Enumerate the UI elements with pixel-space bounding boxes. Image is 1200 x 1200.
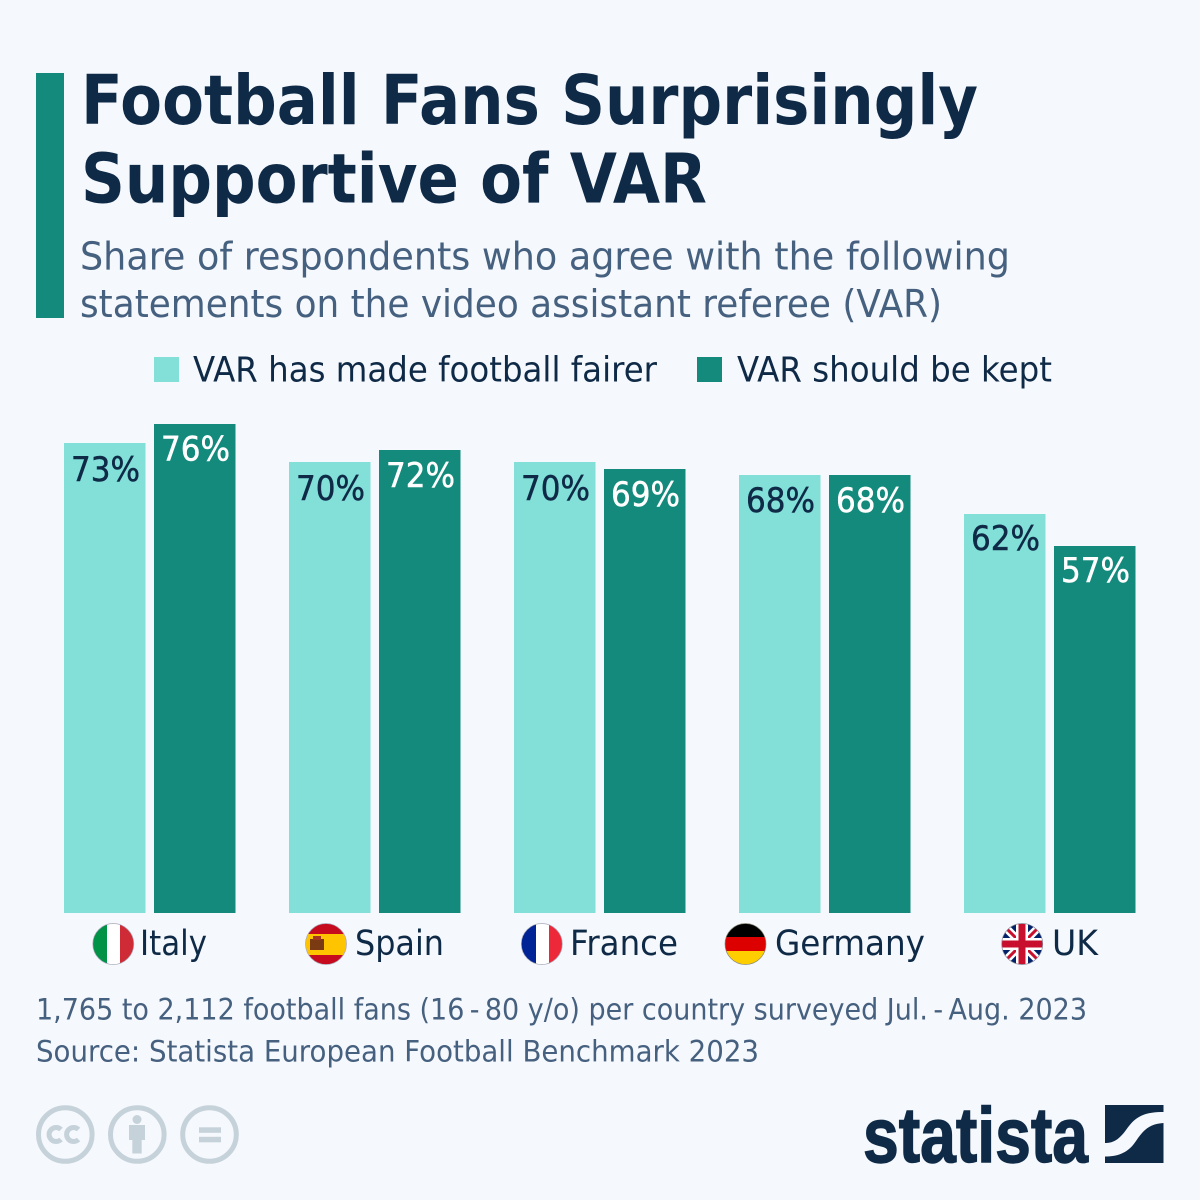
title: Supportive of VAR — [81, 140, 707, 220]
legend: VAR has made football fairer — [193, 350, 658, 390]
bars: Germany: 68% — [836, 481, 905, 521]
bars: France: 70% — [521, 469, 590, 509]
Italy label: Italy — [140, 924, 207, 964]
icon: UK flag — [1001, 923, 1044, 966]
bars: Spain — [289, 450, 460, 913]
statista logo: statista — [863, 1091, 1089, 1179]
bar chart — [64, 424, 1136, 913]
footnote and source: 1,765 to 2,112 football fans (16 - 80 y/o) per country surveyed Jul. - Aug. 2023 — [36, 992, 1087, 1026]
icon: France flag — [521, 923, 563, 965]
bars: Germany: 68% — [746, 481, 815, 521]
icon: creative commons — [39, 1108, 92, 1161]
bars: Italy: 76% — [161, 430, 230, 470]
bars: UK — [964, 514, 1136, 913]
legend — [154, 350, 1052, 390]
bars: Spain: 72% — [386, 456, 455, 496]
UK label: UK — [1052, 924, 1099, 964]
subtitle: Share of respondents who agree with the following — [80, 234, 1010, 278]
icon: no derivatives — [183, 1108, 236, 1161]
bars: Germany — [739, 475, 910, 913]
footnote and source: Source: Statista European Football Benchmark 2023 — [36, 1034, 759, 1068]
bars: UK: 62% — [971, 519, 1040, 559]
bars: Italy — [64, 424, 236, 913]
icon: Germany flag — [724, 923, 767, 965]
icon: Spain flag — [305, 923, 347, 965]
title accent bar — [36, 73, 64, 318]
bars: UK: 57% — [1061, 551, 1130, 591]
bars: Spain: 70% — [296, 469, 365, 509]
footnote and source — [36, 992, 1087, 1068]
bars: France: 69% — [611, 475, 680, 515]
bars: France — [514, 462, 686, 913]
subtitle: statements on the video assistant referee (VAR) — [80, 282, 942, 326]
France label: France — [570, 924, 678, 964]
Spain label: Spain — [355, 924, 444, 964]
bars: Italy: 73% — [71, 450, 140, 490]
subtitle — [80, 234, 1010, 326]
title: Football Fans Surprisingly — [81, 61, 978, 141]
title — [81, 61, 978, 220]
icon: Italy flag — [92, 923, 135, 965]
legend: VAR should be kept — [737, 350, 1052, 390]
icon: attribution — [110, 1108, 164, 1161]
Germany label: Germany — [775, 924, 925, 964]
